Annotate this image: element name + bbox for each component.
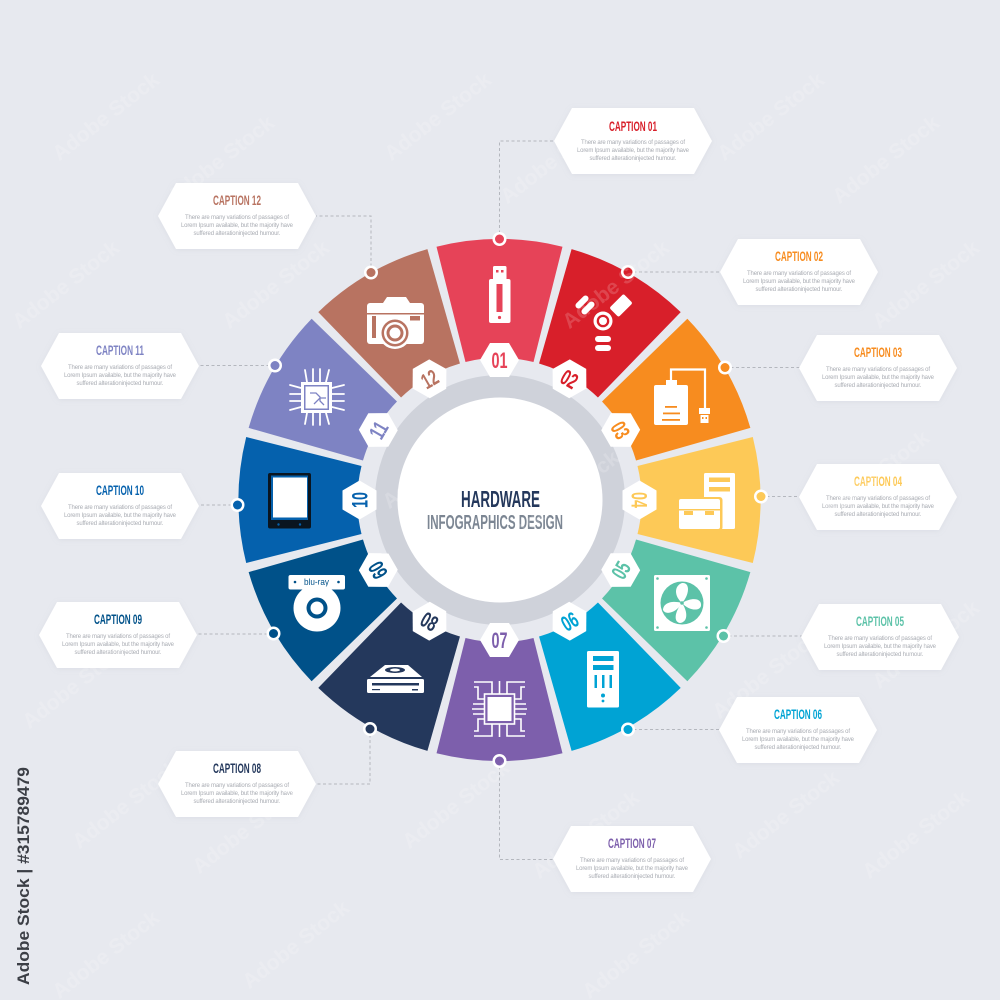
dot 11	[268, 358, 282, 372]
icon: camera	[367, 297, 424, 349]
number badge 11	[354, 405, 403, 455]
caption 03: Lorem Ipsum available, but the majority have	[822, 375, 935, 381]
caption 01: suffered alterationinjected humour.	[590, 156, 677, 162]
icon: blu-ray disc: blu-ray	[304, 577, 329, 587]
icon: cooling fan	[654, 575, 710, 631]
caption 10: There are many variations of passages of	[68, 505, 172, 511]
number badge 08: 08	[416, 607, 442, 636]
caption 03: suffered alterationinjected humour.	[834, 383, 922, 389]
caption 10	[41, 473, 199, 539]
segment 01	[436, 239, 562, 362]
icon: blu-ray disc	[288, 575, 345, 632]
caption 01	[554, 108, 712, 174]
segment 06	[514, 588, 685, 758]
caption 12: There are many variations of passages of	[185, 215, 289, 221]
watermark: Adobe Stock	[380, 68, 496, 165]
caption 02: CAPTION 02	[775, 248, 823, 264]
caption 03: There are many variations of passages of	[826, 367, 930, 373]
number badge 12	[404, 354, 455, 403]
segment 05	[588, 514, 757, 685]
icon: server and briefcase	[678, 473, 735, 530]
dot 03	[718, 360, 732, 374]
dot 05	[716, 629, 730, 643]
number badge 08	[404, 597, 455, 646]
caption 06: There are many variations of passages of	[746, 729, 850, 735]
title: INFOGRAPHICS DESIGN	[427, 512, 563, 534]
caption 11: Lorem Ipsum available, but the majority have	[64, 373, 177, 379]
dot 10	[230, 498, 244, 512]
dot 04	[754, 490, 768, 504]
segment 12	[314, 242, 485, 412]
number badge 11: 11	[364, 417, 394, 443]
segment 04	[638, 437, 761, 563]
caption 10: suffered alterationinjected humour.	[76, 521, 164, 527]
icon: microchip	[472, 681, 527, 737]
caption 12	[158, 183, 316, 249]
icon: optical drive	[367, 665, 424, 693]
number badge 06	[544, 597, 595, 646]
number badge 12: 12	[417, 364, 443, 394]
number badge 06: 06	[557, 607, 583, 636]
caption 09: There are many variations of passages of	[66, 634, 170, 640]
caption 02: suffered alterationinjected humour.	[756, 287, 843, 293]
dot 08	[363, 722, 377, 736]
caption 09: suffered alterationinjected humour.	[74, 650, 162, 656]
dot 09	[266, 626, 280, 640]
caption 02	[720, 239, 878, 305]
caption 12: Lorem Ipsum available, but the majority have	[181, 223, 294, 229]
caption 05: suffered alterationinjected humour.	[836, 652, 924, 658]
number badge 07	[480, 623, 519, 657]
watermark: Adobe Stock	[496, 111, 612, 208]
number badge 10	[342, 480, 376, 520]
watermark: Adobe Stock	[528, 786, 644, 883]
segment 08	[314, 588, 485, 758]
watermark: Adobe Stock	[713, 68, 829, 165]
caption 09: Lorem Ipsum available, but the majority have	[62, 642, 175, 648]
number badge 01: 01	[492, 348, 508, 373]
title	[427, 486, 563, 534]
segment 07	[436, 638, 562, 761]
watermark: Adobe Stock	[558, 236, 674, 333]
caption 11: suffered alterationinjected humour.	[76, 381, 164, 387]
watermark: Adobe Stock	[18, 636, 134, 733]
caption 04: suffered alterationinjected humour.	[834, 512, 922, 518]
number badge 07: 07	[492, 628, 508, 653]
number badge 03: 03	[605, 417, 635, 443]
caption 01: CAPTION 01	[609, 118, 657, 134]
caption 05: There are many variations of passages of	[828, 636, 932, 642]
number badge 04	[622, 480, 656, 520]
caption 07	[553, 826, 711, 892]
number badge 10: 10	[348, 492, 372, 508]
icon: usb drive	[489, 266, 510, 323]
watermark: Adobe Stock	[828, 111, 944, 208]
caption 10: Lorem Ipsum available, but the majority have	[64, 513, 177, 519]
number badge 09	[354, 545, 403, 595]
watermark: Adobe Stock	[868, 596, 984, 693]
caption 04	[799, 464, 957, 530]
segment 11	[242, 315, 411, 486]
caption 09: CAPTION 09	[94, 611, 142, 627]
watermark: Adobe Stock	[708, 626, 824, 723]
watermark: Adobe Stock	[188, 781, 304, 878]
number badge 05	[596, 545, 645, 595]
caption 05: Lorem Ipsum available, but the majority have	[824, 644, 937, 650]
caption 06: CAPTION 06	[774, 706, 822, 722]
caption 08: suffered alterationinjected humour.	[194, 799, 281, 805]
number badge 03	[596, 405, 645, 455]
number badge 01	[480, 343, 519, 377]
caption 09	[39, 602, 197, 668]
caption 08	[158, 751, 316, 817]
caption 04: There are many variations of passages of	[826, 496, 930, 502]
watermark: Adobe Stock	[868, 236, 984, 333]
watermark: Adobe Stock	[858, 786, 974, 883]
caption 12: suffered alterationinjected humour.	[194, 231, 281, 237]
watermark: Adobe Stock	[378, 416, 494, 513]
caption 06: suffered alterationinjected humour.	[754, 745, 842, 751]
caption 06	[719, 697, 877, 763]
caption 11: CAPTION 11	[96, 342, 144, 358]
caption 07: There are many variations of passages of	[580, 858, 684, 864]
center disc	[398, 398, 602, 602]
caption 05	[801, 604, 959, 670]
inner ring	[375, 375, 625, 625]
caption 07: suffered alterationinjected humour.	[588, 874, 676, 880]
caption 07: CAPTION 07	[608, 835, 656, 851]
caption 11	[41, 333, 199, 399]
segment 03	[588, 315, 757, 486]
caption 03	[799, 335, 957, 401]
watermark: Adobe Stock	[48, 68, 164, 165]
dot 07	[492, 754, 506, 768]
caption 08: Lorem Ipsum available, but the majority have	[181, 791, 294, 797]
dot 06	[621, 722, 635, 736]
caption 11: There are many variations of passages of	[68, 365, 172, 371]
caption 06: Lorem Ipsum available, but the majority have	[742, 737, 855, 743]
caption 10: CAPTION 10	[96, 482, 144, 498]
caption 07: Lorem Ipsum available, but the majority have	[576, 866, 689, 872]
caption 01: Lorem Ipsum available, but the majority have	[577, 148, 690, 154]
caption 02: Lorem Ipsum available, but the majority have	[743, 279, 856, 285]
number badge 04: 04	[626, 492, 652, 508]
caption 05: CAPTION 05	[856, 613, 904, 629]
segment 02	[514, 242, 685, 412]
watermark: Adobe Stock	[238, 896, 354, 993]
caption 08: There are many variations of passages of	[185, 783, 289, 789]
dot 02	[621, 265, 635, 279]
number badge 09: 09	[363, 557, 393, 583]
icon: circuit processor	[290, 369, 344, 425]
icon: power bank with cable	[654, 370, 710, 425]
caption 12: CAPTION 12	[213, 192, 261, 208]
segment 10	[238, 437, 362, 563]
caption 02: There are many variations of passages of	[747, 271, 851, 277]
watermark: Adobe Stock	[398, 756, 514, 853]
watermark: Adobe Stock	[68, 756, 184, 853]
number badge 05: 05	[606, 557, 636, 583]
icon: desktop tower	[587, 651, 619, 708]
segment 09	[242, 514, 411, 685]
watermark: Adobe Stock	[508, 446, 624, 543]
dot 12	[364, 266, 378, 280]
title: HARDWARE	[461, 486, 540, 512]
caption 01: There are many variations of passages of	[581, 140, 685, 146]
caption 08: CAPTION 08	[213, 760, 261, 776]
watermark: Adobe Stock	[818, 426, 934, 523]
number badge 02: 02	[556, 364, 582, 394]
connector lines	[197, 141, 802, 860]
caption 04: CAPTION 04	[854, 473, 902, 489]
number badge 02	[544, 354, 595, 403]
watermark: Adobe Stock	[728, 766, 844, 863]
watermark: Adobe Stock	[218, 236, 334, 333]
caption 03: CAPTION 03	[854, 344, 902, 360]
caption 04: Lorem Ipsum available, but the majority have	[822, 504, 935, 510]
icon: tablet	[268, 473, 311, 528]
dot 01	[492, 232, 506, 246]
icon: firewire parts	[574, 294, 633, 351]
watermark: Adobe Stock	[8, 236, 124, 333]
stock id: Adobe Stock | #315789479	[15, 767, 33, 985]
watermark: Adobe Stock	[163, 111, 279, 208]
